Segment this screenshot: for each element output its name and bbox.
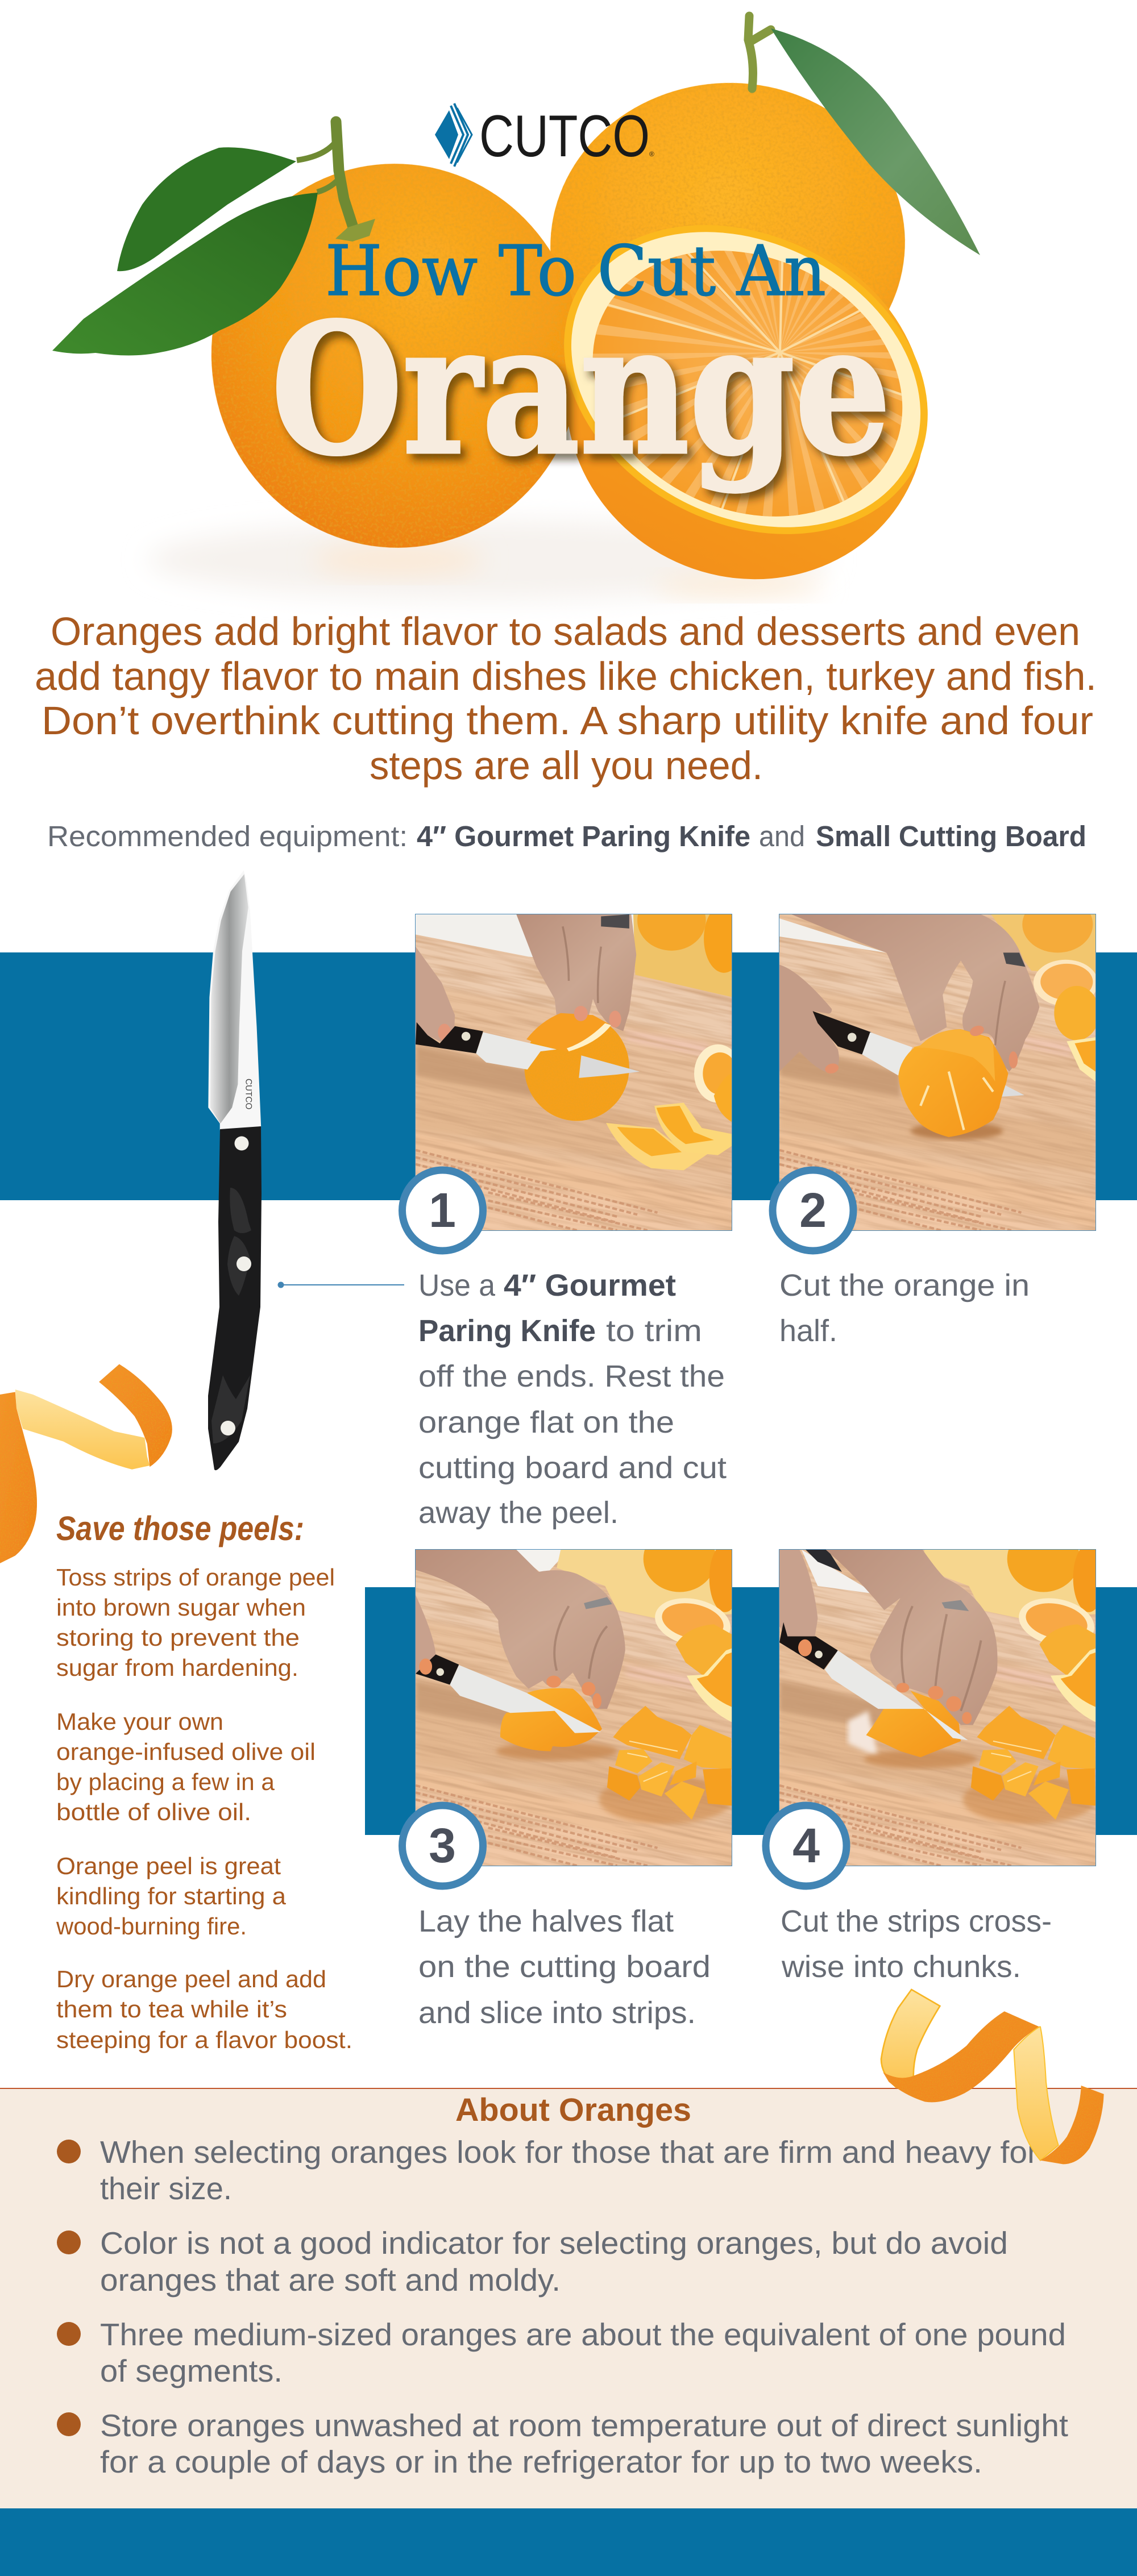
- step 4 text: [781, 1904, 1052, 1984]
- calyx: [335, 219, 375, 242]
- blade brand text: CUTCO: [244, 1079, 254, 1109]
- connector line: [277, 1282, 404, 1288]
- step 3 text: on the cutting board: [418, 1950, 711, 1984]
- title line: Orange: Orange: [271, 284, 891, 495]
- step 2 text: [779, 1268, 1030, 1348]
- peel tip 2: [56, 1708, 316, 1825]
- orange being sliced: [866, 1691, 961, 1757]
- step 1 text: away the peel.: [418, 1496, 619, 1530]
- bottom blue footer band: [0, 2508, 1137, 2576]
- handle highlights: [211, 1188, 251, 1443]
- number badge 1: 1: [429, 1183, 456, 1238]
- number badge 2: 2: [799, 1183, 827, 1238]
- recommended equipment line: and: [759, 820, 805, 852]
- right leaf: [771, 28, 980, 255]
- peel tip 1: [56, 1564, 335, 1681]
- intro paragraph: steps are all you need.: [370, 743, 763, 788]
- step 1 text: [418, 1268, 727, 1530]
- step 2 text: half.: [779, 1314, 837, 1348]
- knife handle: [813, 1011, 871, 1054]
- photo: step 3: [313, 1449, 839, 1974]
- rivets: [221, 1137, 251, 1435]
- hand: [416, 1550, 625, 1709]
- title: [271, 231, 891, 495]
- hero illustration: oranges and leaves: [52, 16, 985, 641]
- upper hand: [516, 914, 636, 1031]
- bullet 1: When selecting oranges look for those that are firm and heavy for: [100, 2134, 1038, 2170]
- peel tip 1: storing to prevent the: [56, 1624, 300, 1651]
- step 1 text: Use a: [418, 1268, 496, 1302]
- hand: [826, 1550, 998, 1725]
- left hand: [779, 1550, 818, 1654]
- peel tip 3: Orange peel is great: [56, 1853, 281, 1879]
- knife in hand: [416, 1022, 483, 1054]
- peel tip 3: wood-burning fire.: [56, 1913, 247, 1940]
- bullet 4: for a couple of days or in the refrigerator for up to two weeks.: [100, 2444, 982, 2479]
- bullet 2: oranges that are soft and moldy.: [100, 2262, 561, 2298]
- registered mark: ®: [649, 150, 654, 158]
- peel tip 4: [56, 1966, 352, 2053]
- orange being peeled: [524, 1026, 629, 1121]
- number badge 4: 4: [792, 1818, 820, 1873]
- left stem: [336, 122, 355, 234]
- number badge 3: [402, 1805, 483, 1886]
- knife handle: [208, 1126, 262, 1470]
- cut orange half: [564, 225, 928, 580]
- right stem: [748, 16, 771, 89]
- step 1 text: orange flat on the: [418, 1405, 674, 1439]
- step 4 text: wise into chunks.: [781, 1950, 1021, 1984]
- step 3 text: Lay the halves flat: [418, 1904, 674, 1938]
- step 4 text: Cut the strips cross-: [781, 1904, 1052, 1938]
- logo diamond icon: [435, 103, 472, 167]
- peel tip 1: into brown sugar when: [56, 1594, 306, 1621]
- intro paragraph: Don’t overthink cutting them. A sharp utility knife and four: [42, 698, 1093, 743]
- recommended equipment line: Small Cutting Board: [816, 820, 1086, 852]
- blue band lower: [365, 1587, 1137, 1835]
- number badge 1: [402, 1170, 483, 1251]
- left hand: [779, 965, 839, 1073]
- step 2 text: Cut the orange in: [779, 1268, 1030, 1302]
- step 1 text: to trim: [606, 1314, 702, 1348]
- knife blade: [825, 1650, 968, 1740]
- peel tip 3: [56, 1853, 287, 1940]
- peel tip 3: kindling for starting a: [56, 1883, 287, 1909]
- bullet 2: Color is not a good indicator for selecting oranges, but do avoid: [100, 2225, 1008, 2261]
- save those peels heading: Save those peels:: [56, 1509, 304, 1547]
- knife blade: [450, 1665, 601, 1733]
- step 1 text: Paring Knife: [418, 1314, 596, 1348]
- step 1 text: 4″ Gourmet: [504, 1268, 676, 1302]
- front orange: [192, 145, 600, 566]
- intro paragraph: add tangy flavor to main dishes like chicken, turkey and fish.: [35, 654, 1097, 698]
- logo wordmark: CUTCO: [479, 103, 650, 169]
- bullet 4: Store oranges unwashed at room temperature out of direct sunlight: [100, 2408, 1068, 2443]
- bullet 1: their size.: [100, 2171, 232, 2206]
- orange peel curl right: [881, 1990, 1104, 2164]
- reflection under oranges: [148, 520, 830, 600]
- about heading: About Oranges: [455, 2092, 691, 2128]
- juice: [496, 1742, 617, 1761]
- number badge 3: 3: [429, 1818, 456, 1873]
- knife blade: [208, 871, 261, 1130]
- orange peel curl left: [0, 1364, 172, 1563]
- paring knife: [208, 871, 262, 1470]
- step 1 text: cutting board and cut: [418, 1451, 727, 1485]
- bullet 3: of segments.: [100, 2353, 283, 2388]
- ring: [941, 1600, 969, 1611]
- nails: [419, 1658, 601, 1708]
- left hand: [416, 947, 455, 1045]
- recommended equipment line: 4″ Gourmet Paring Knife: [417, 820, 750, 852]
- juice: [864, 1750, 977, 1768]
- peel tip 2: by placing a few in a: [56, 1768, 275, 1795]
- peeled orange: [898, 1029, 1008, 1137]
- photo: step 2: [779, 914, 1096, 1231]
- peel tip 4: them to tea while it’s: [56, 1996, 287, 2022]
- nails: [438, 1006, 621, 1041]
- peel tip 2: Make your own: [56, 1708, 223, 1735]
- left hand: [416, 1595, 435, 1675]
- peel tip 2: orange-infused olive oil: [56, 1738, 316, 1765]
- peel tip 4: steeping for a flavor boost.: [56, 2026, 352, 2053]
- bullet 4: [57, 2408, 1068, 2479]
- blade: [862, 1032, 912, 1076]
- nails: [798, 1639, 972, 1724]
- recommended equipment line: Recommended equipment:: [47, 820, 408, 852]
- juice shadow: [910, 1122, 1003, 1140]
- bullet 2: [57, 2225, 1008, 2298]
- peel tip 4: Dry orange peel and add: [56, 1966, 326, 1992]
- intro paragraph: [35, 609, 1097, 788]
- peel tip 1: Toss strips of orange peel: [56, 1564, 335, 1591]
- about oranges panel: [0, 2088, 1137, 2508]
- nails: [824, 1024, 1018, 1075]
- orange being sliced: [500, 1688, 602, 1751]
- title line: How To Cut An: How To Cut An: [325, 231, 826, 311]
- bullet 3: Three medium-sized oranges are about the equivalent of one pound: [100, 2317, 1066, 2352]
- Cutco logo: [435, 103, 654, 169]
- step 3 text: and slice into strips.: [418, 1996, 696, 2030]
- knife handle: [779, 1622, 838, 1670]
- left lower leaf: [52, 193, 318, 356]
- ring: [584, 1597, 612, 1609]
- left upper leaf: [117, 147, 296, 271]
- photo: step 4: [677, 1449, 1137, 1974]
- step 1 text: off the ends. Rest the: [418, 1359, 725, 1393]
- ring: [1003, 952, 1026, 967]
- number badge 2: [773, 1170, 853, 1251]
- back orange: [540, 71, 916, 418]
- bullet 1: [57, 2134, 1038, 2206]
- bullet 3: [57, 2317, 1066, 2388]
- white juice spill: [848, 1711, 878, 1757]
- photo: step 1: [415, 914, 732, 1231]
- peel tip 1: sugar from hardening.: [56, 1654, 298, 1681]
- peel tip 2: bottle of olive oil.: [56, 1799, 251, 1825]
- peel curls: [606, 1123, 712, 1170]
- knife handle: [416, 1654, 459, 1685]
- number badge 4: [766, 1805, 846, 1886]
- left twigs: [297, 142, 341, 192]
- recommended equipment line: [47, 820, 1086, 852]
- step 3 text: [418, 1904, 711, 2030]
- right orange slice: [694, 1044, 732, 1102]
- blue band top: [0, 952, 1137, 1200]
- hand: [791, 914, 1039, 1072]
- intro paragraph: Oranges add bright flavor to salads and desserts and even: [51, 609, 1080, 654]
